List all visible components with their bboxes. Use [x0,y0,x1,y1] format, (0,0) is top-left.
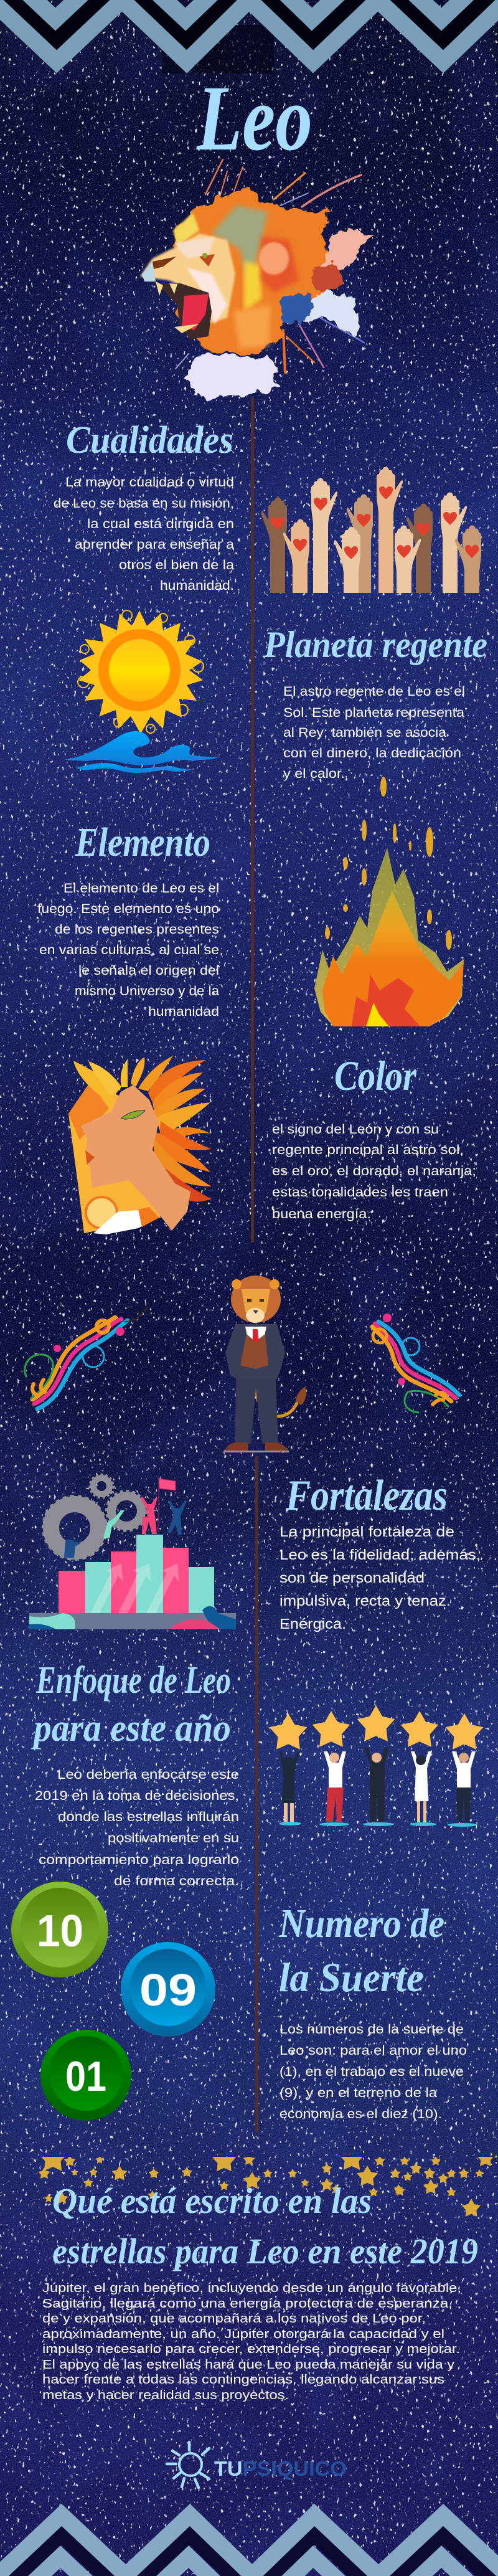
text block: elemento: fuego. Este elemento es uno [37,902,219,916]
icon: number 10 ball: 10 [37,1906,83,1956]
heading: que esta escrito: Qué está escrito en las [52,2181,372,2221]
heading: cualidades: Cualidades [66,419,233,462]
man: vest [240,1334,268,1369]
lion: blue right splash [285,290,359,335]
growth arrows [90,1563,179,1613]
heading: color: Color [334,1052,416,1099]
text block: horoscope: metas y hacer realidad sus proyectos. [42,2389,289,2402]
gears [44,1474,146,1559]
icon: raised hands with hearts [261,467,481,593]
people [279,1747,476,1823]
text block: fortalezas: Enérgica. [280,1616,346,1632]
panel: color [272,1052,476,1221]
text block: elemento: mismo Universo y de la [75,984,219,998]
stars [270,1705,483,1750]
text block: enfoque de leo: donde las estrellas influirán [58,1810,239,1824]
man: muzzle [246,1308,265,1323]
fire: outer flame [314,848,464,1026]
illustration: people holding stars [270,1705,483,1827]
fire: orange flame [322,891,464,1026]
panel: planeta regente [263,624,487,781]
text block: numero de la suerte: economía es el diez (10). [280,2107,442,2121]
panel: elemento [37,820,219,1019]
man: right ear [270,1279,280,1289]
woman: small lion [86,1197,117,1228]
text block: enfoque de leo: positivamente en su [108,1831,239,1845]
man: shoes [225,1442,288,1451]
heading: numero de la suerte [278,1901,444,2001]
text block: fortalezas: son de personalidad [280,1570,425,1586]
logo: tupsiquico [167,2442,347,2488]
bottom zigzag border [0,2515,498,2576]
timeline line: upper [251,397,254,1243]
icon: sun [78,610,204,734]
icon: blue wave [63,731,218,773]
sun: core [109,639,170,701]
heading: que esta escrito: estrellas para Leo en este 2019 [52,2231,478,2271]
text block: planeta regente: con el dinero, la dedicación [283,746,461,760]
bars [59,1571,85,1613]
lion: splash lines [176,159,364,372]
fire: sparks [325,777,452,950]
woman: yellow-orange backing [68,1082,161,1233]
logo: wordmark: TUPSIQUICO [214,2457,347,2480]
ground [29,1613,236,1629]
woman: hair strands [73,1056,212,1202]
man: face [242,1289,270,1322]
heading: elemento: Elemento [75,820,210,865]
lion: face [140,234,235,324]
text block: cualidades: la cual está dirigida en [87,517,234,531]
text block: elemento: le señala el origen del [78,964,219,978]
text block: planeta regente [283,684,465,781]
lion: mane colour washes [212,206,268,286]
lion: open mouth [157,283,212,339]
lion: watercolor body [168,186,375,402]
text block: cualidades: La mayor cualidad o virtud [65,475,234,490]
heading: enfoque de leo: Enfoque de Leo [35,1659,231,1702]
text block: numero de la suerte: Los números de la suerte de [280,2022,464,2037]
ground shapes [29,1613,75,1629]
man: mane [231,1276,281,1323]
panel: numero de la suerte [278,1901,467,2121]
man: tie [253,1329,259,1342]
text block: planeta regente: al Rey; también se asocia [283,726,446,740]
text block: cualidades [54,475,234,593]
lion: lower white splash [184,354,281,402]
icon: number 09 ball [121,1942,215,2037]
bases [279,1822,477,1827]
illustration: woman with fire hair [68,1056,212,1234]
woman: white lion body and orange cloth [93,1210,159,1234]
man: shirt [245,1327,266,1339]
illustration: watercolor lion head [140,159,375,402]
heading: fortalezas: Fortalezas [285,1472,448,1520]
timeline line: lower [255,1456,258,2133]
logo: sun icon [167,2442,209,2488]
text block: numero de la suerte: (1), en el trabajo es el nueve [280,2065,464,2079]
icon: number 01 ball [40,2030,131,2121]
text block: color: el signo del León y con su [272,1122,439,1137]
panel: que esta escrito en las estrellas [42,2181,478,2402]
man: jacket [225,1324,285,1379]
icon: right colorful swirl [372,1314,459,1413]
text block: horoscope: Júpiter, el gran benéfico, incluyendo desde un ángulo favorable, [42,2281,461,2295]
text block: horoscope [42,2281,461,2402]
text block: elemento: de los regentes presentes [55,922,219,937]
text block: color: es el oro, el dorado, el naranja; [272,1164,476,1178]
text block: fortalezas: La principal fortaleza de [280,1523,454,1540]
lion: dark blue tuft [283,293,314,324]
text block: horoscope: hacer frente a todas las contingencias, llegando alcanzar sus [42,2373,444,2387]
woman: lips [85,1150,95,1165]
text block: elemento [37,881,219,1019]
text block: elemento: en varias culturas, al cual se [39,943,219,957]
fire: yellow core [366,1003,389,1026]
text block: horoscope: El apoyo de las estrellas hará que Leo pueda manejar su vida y [42,2358,454,2372]
man: trousers [235,1364,278,1444]
text block: color: regente principal al astro sol, [272,1143,464,1157]
text block: horoscope: impulso necesario para crecer, extenderse, progresar y mejorar. [42,2342,460,2356]
woman: face [81,1085,190,1231]
heading: que esta escrito [52,2181,478,2271]
fire: red core [352,975,420,1026]
text block: fortalezas [280,1523,481,1632]
woman: eye [121,1110,145,1119]
text block: color: estas tonalidades les traen [272,1185,448,1200]
text block: fortalezas: Leo es la fidelidad; además, [280,1546,481,1563]
man: tail [254,1383,299,1416]
text block: numero de la suerte: (9), y en el terreno de la [280,2086,437,2100]
icon: number 09 ball: 09 [139,1966,197,2015]
text block: elemento: El elemento de Leo es el [63,881,219,896]
text block: cualidades: humanidad. [160,579,234,593]
text block: enfoque de leo: de forma correcta. [114,1874,239,1888]
man: eyes and nose [247,1299,264,1314]
text block: enfoque de leo: comportamiento para lograrlo [39,1853,239,1867]
text block: horoscope: Sagitario, llegará como una energía protectora de esperanza, [42,2297,453,2311]
text block: cualidades: aprender para enseñar a [75,537,234,552]
text block: planeta regente: y el calor. [283,767,345,781]
icon: fire [314,777,464,1026]
text block: enfoque de leo: 2019 en la toma de decisiones, [35,1789,239,1803]
people [64,1497,187,1558]
icon: number 10 ball [11,1882,108,1977]
text block: planeta regente: Sol. Este planeta representa [283,706,464,720]
heading: numero de la suerte: la Suerte [279,1955,424,2001]
flag [159,1477,176,1532]
text block: fortalezas: impulsiva, recta y tenaz. [280,1593,451,1609]
chart illustration: growth bars with people [29,1474,236,1629]
illustration: lion in a suit [223,1276,306,1452]
lion: orange mane [168,186,342,352]
text block: elemento: humanidad [148,1005,219,1019]
text block: planeta regente: El astro regente de Leo es el [283,684,465,699]
text block: color: buena energía. [272,1207,371,1221]
panel: cualidades [54,419,234,593]
panel: fortalezas [280,1472,481,1632]
man: platform [223,1451,289,1452]
text block: enfoque de leo [35,1768,239,1888]
text block: cualidades: de Leo se basa en su misión, [54,496,234,511]
heading: enfoque de leo [31,1659,231,1750]
text block: numero de la suerte [280,2022,467,2121]
text block: cualidades: otros el bien de la [119,558,234,572]
panel: enfoque de leo [31,1659,239,1888]
lion: pink right patch [324,227,375,274]
text block: color [272,1122,476,1221]
text block: enfoque de leo: Leo debería enfocarse este [57,1768,239,1782]
top zigzag border [0,0,498,73]
sun: curls [78,610,204,733]
man: ears [232,1279,242,1289]
text block: horoscope: aproximadamente, un año. Júpiter otorgará la capacidad y el [42,2327,444,2341]
decoration: gold stars garland [39,2157,494,2217]
icon: left colorful swirl [25,1307,148,1409]
text block: horoscope: de y expansión, que acompañará a los nativos de Leo por, [42,2312,426,2326]
heading: enfoque de leo: para este año [31,1707,231,1750]
text block: numero de la suerte: Leo son: para el amor el uno [280,2043,467,2058]
icon: number 01 ball: 01 [65,2053,106,2100]
sun: flame rays [78,610,203,734]
title: Leo [195,67,312,170]
heading: numero de la suerte: Numero de [278,1901,444,1946]
